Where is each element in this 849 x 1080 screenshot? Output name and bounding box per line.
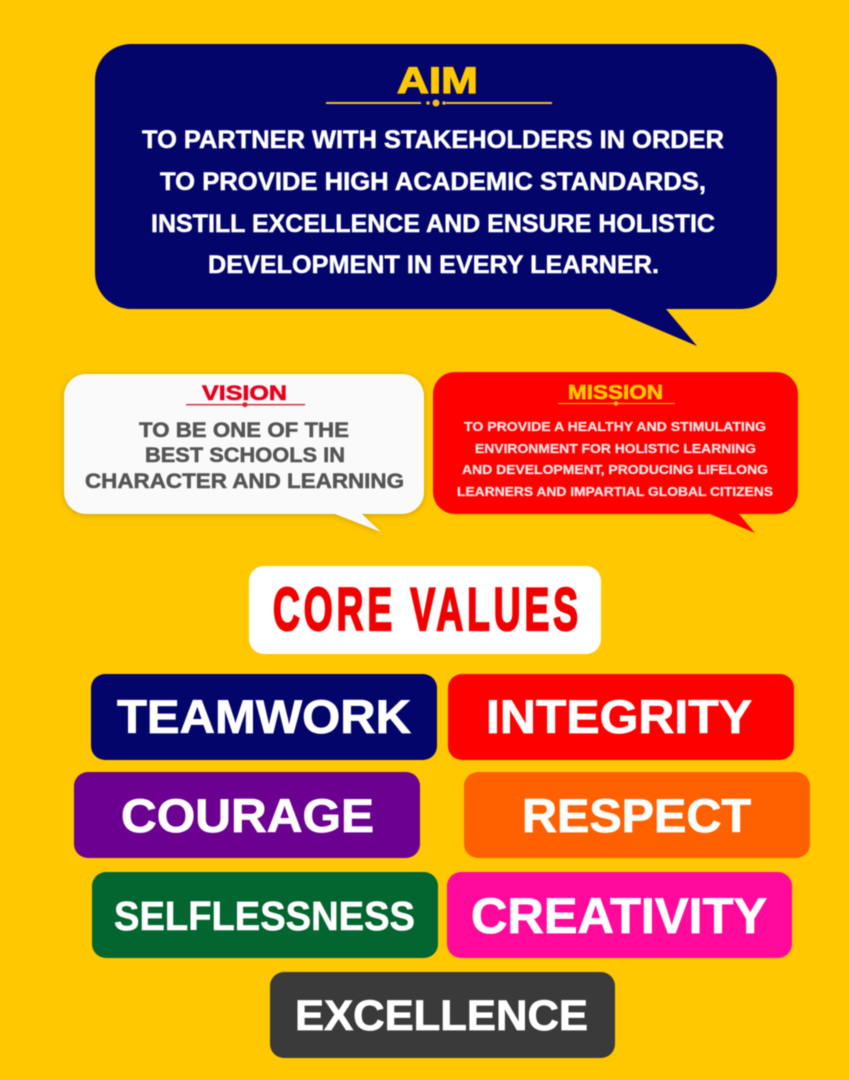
value: respect: RESPECT [522,789,751,842]
mission heading ornament [558,401,675,406]
value: courage [74,772,420,858]
value: excellence [270,972,615,1058]
panel: mission speech bubble [433,372,798,533]
mission statement [457,420,773,499]
mission statement: AND DEVELOPMENT, PRODUCING LIFELONG [462,463,768,477]
aim statement [142,126,724,279]
panel: aim speech bubble [95,44,777,346]
vision bubble shape [64,374,424,532]
core values heading [249,566,601,654]
aim bubble shape [95,44,777,346]
vision statement: CHARACTER AND LEARNING [85,470,404,493]
mission heading: MISSION [568,382,663,404]
value: selflessness [92,872,438,958]
aim statement: TO PROVIDE HIGH ACADEMIC STANDARDS, [160,168,706,196]
value: teamwork: TEAMWORK [117,690,411,743]
vision heading ornament [186,402,305,407]
vision statement: TO BE ONE OF THE [139,419,349,442]
value: courage: COURAGE [121,789,374,842]
value: teamwork [91,674,437,760]
mission statement: ENVIRONMENT FOR HOLISTIC LEARNING [475,442,756,456]
value: respect [464,772,810,858]
core values heading: CORE VALUES [273,576,578,643]
mission bubble shape [433,372,798,533]
vision statement [85,419,404,493]
aim statement: TO PARTNER WITH STAKEHOLDERS IN ORDER [142,126,724,154]
vision statement: BEST SCHOOLS IN [145,444,345,467]
value: creativity [447,872,792,958]
mission statement: TO PROVIDE A HEALTHY AND STIMULATING [464,420,766,434]
aim heading ornament [326,100,552,106]
value: creativity: CREATIVITY [471,888,767,944]
panel: vision speech bubble [64,374,424,532]
aim heading: AIM [397,60,478,101]
value: integrity [448,674,794,760]
aim statement: DEVELOPMENT IN EVERY LEARNER. [208,251,659,279]
value: integrity: INTEGRITY [486,690,752,743]
aim statement: INSTILL EXCELLENCE AND ENSURE HOLISTIC [151,210,715,238]
vision heading: VISION [202,382,287,405]
value: excellence: EXCELLENCE [295,992,588,1040]
mission statement: LEARNERS AND IMPARTIAL GLOBAL CITIZENS [457,485,773,499]
value: selflessness: SELFLESSNESS [114,893,415,939]
